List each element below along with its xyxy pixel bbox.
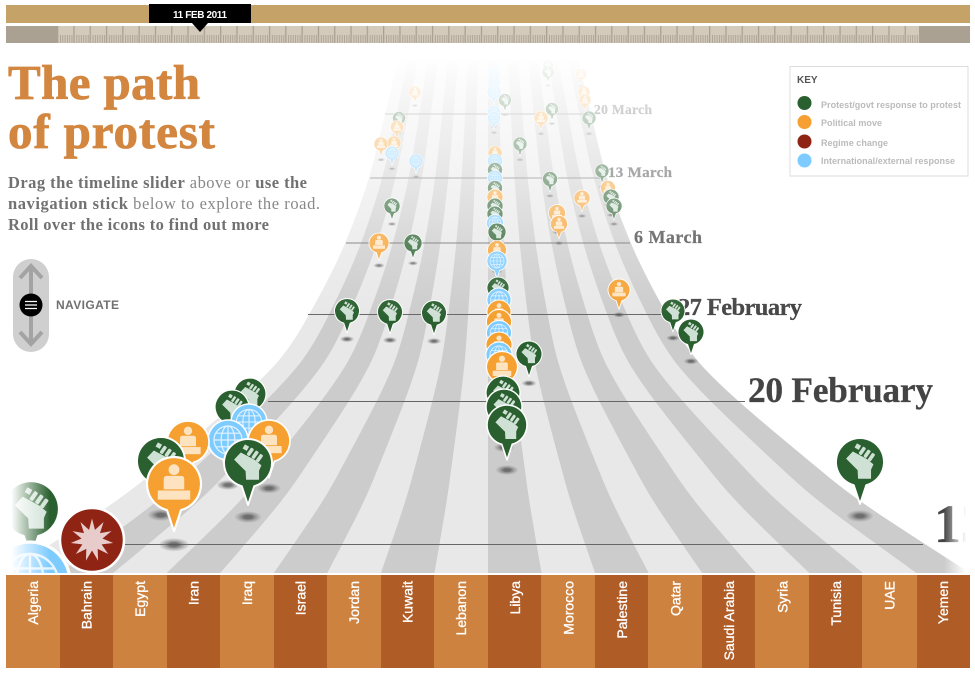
timeline bar: [6, 5, 970, 43]
country labels: Yemen: [935, 581, 951, 624]
key panel: KEY: [797, 75, 818, 86]
country labels: Algeria: [25, 581, 41, 625]
country labels: UAE: [882, 581, 898, 610]
country labels: Jordan: [346, 581, 362, 624]
country labels: Qatar: [668, 581, 684, 616]
mid pins: March: [369, 146, 622, 286]
title: [8, 55, 216, 159]
instructions text: Roll over the icons to find out more: [8, 215, 269, 234]
date labels: [594, 102, 975, 554]
title: of protest: [8, 104, 216, 159]
key panel: [790, 66, 968, 176]
left pin cluster: [137, 378, 290, 551]
date labels: 13 March: [608, 165, 673, 181]
country labels: Kuwait: [400, 581, 416, 623]
pin: right green fist: [836, 438, 884, 522]
country labels: Israel: [292, 581, 308, 615]
key panel: Regime change: [821, 138, 888, 148]
key panel: Political move: [821, 118, 882, 128]
country labels: Iran: [186, 581, 202, 605]
date labels: 20 February: [748, 370, 933, 410]
country labels: Iraq: [239, 581, 255, 605]
date labels: 6 March: [634, 227, 702, 247]
country labels: Libya: [507, 581, 523, 614]
instructions text: [8, 173, 320, 234]
title: The path: [8, 55, 200, 110]
navigate label: NAVIGATE: [56, 298, 119, 312]
country columns: [6, 575, 970, 668]
country labels: Palestine: [614, 581, 630, 639]
country labels: Tunisia: [828, 581, 844, 626]
timeline slider: 11 Feb 2011: 11 FEB 2011: [173, 10, 227, 21]
country labels: Bahrain: [78, 581, 94, 629]
instructions text: Drag the timeline slider above or use the: [8, 173, 307, 192]
country labels: Morocco: [560, 581, 576, 635]
key panel: Protest/govt response to protest: [821, 100, 961, 110]
instructions text: navigation stick below to explore the road.: [8, 194, 320, 213]
country labels: Syria: [774, 581, 790, 613]
date labels: 20 March: [594, 102, 652, 117]
country labels: [25, 581, 951, 660]
date labels: 27 February: [678, 294, 803, 321]
navigation stick: [13, 259, 49, 352]
far pins: late March: [374, 60, 596, 178]
foreground pins: Algeria and Bahrain: [13, 482, 126, 573]
country labels: Egypt: [132, 581, 148, 617]
road with lane stripes: [13, 63, 965, 573]
country labels: Saudi Arabia: [721, 581, 737, 660]
key panel: International/external response: [821, 156, 955, 166]
distance fade overlays: [6, 44, 970, 573]
timeline slider: 11 Feb 2011: [149, 4, 251, 32]
near pins: late February: [334, 277, 704, 475]
country labels: Lebanon: [453, 581, 469, 636]
